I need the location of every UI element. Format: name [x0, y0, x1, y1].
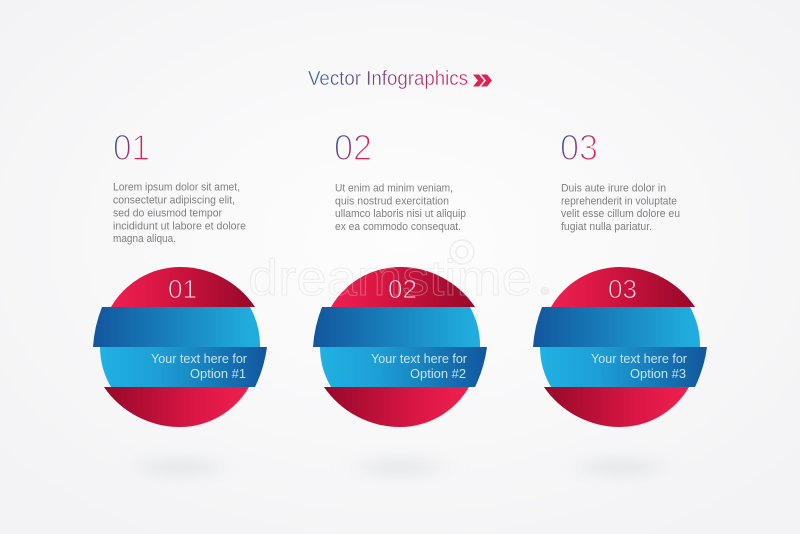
circle option 2 [313, 267, 487, 427]
column 1 intro: incididunt ut labore et dolore [113, 220, 246, 232]
column 1 intro: consectetur adipiscing elit, [113, 194, 235, 206]
circle option 3: Your text here for [591, 351, 688, 366]
column 1 intro [113, 127, 246, 245]
circle option 1: Option #1 [190, 366, 246, 381]
column 2 intro: quis nostrud exercitation [335, 196, 449, 208]
column 3 intro [560, 127, 680, 233]
column 1 intro: Lorem ipsum dolor sit amet, [113, 182, 240, 194]
watermark: dreamstime [248, 250, 532, 306]
column 3 intro: Duis aute irure dolor in [561, 182, 666, 194]
column 2 intro [334, 127, 466, 233]
column 1 intro: magna aliqua. [113, 233, 176, 245]
column 2 intro: 02 [334, 127, 372, 168]
column 1 intro: 01 [113, 127, 150, 168]
title: Vector Infographics [308, 68, 468, 90]
circle option 2: Option #2 [410, 366, 466, 381]
circle option 2: 02 [388, 274, 417, 304]
column 2 intro: ex ea commodo consequat. [335, 221, 461, 233]
circle option 3 [533, 267, 707, 427]
column 1 intro: sed do eiusmod tempor [113, 208, 222, 220]
circle option 1: Your text here for [151, 351, 248, 366]
column 2 intro: ullamco laboris nisi ut aliquip [335, 208, 466, 220]
column 2 intro: Ut enim ad minim veniam, [335, 182, 453, 194]
floor shadow 3 [578, 458, 662, 476]
column 3 intro: fugiat nulla pariatur. [561, 221, 652, 233]
column 3 intro: reprehenderit in voluptate [561, 196, 677, 208]
floor shadow 1 [138, 458, 222, 476]
column 3 intro: velit esse cillum dolore eu [561, 208, 680, 220]
column 3 intro: 03 [560, 127, 598, 168]
circle option 1 [93, 267, 267, 427]
circle option 1: 01 [168, 274, 197, 304]
circle option 3: Option #3 [630, 366, 686, 381]
floor shadow 2 [358, 458, 442, 476]
circle option 3: 03 [608, 274, 637, 304]
circle option 2: Your text here for [371, 351, 468, 366]
